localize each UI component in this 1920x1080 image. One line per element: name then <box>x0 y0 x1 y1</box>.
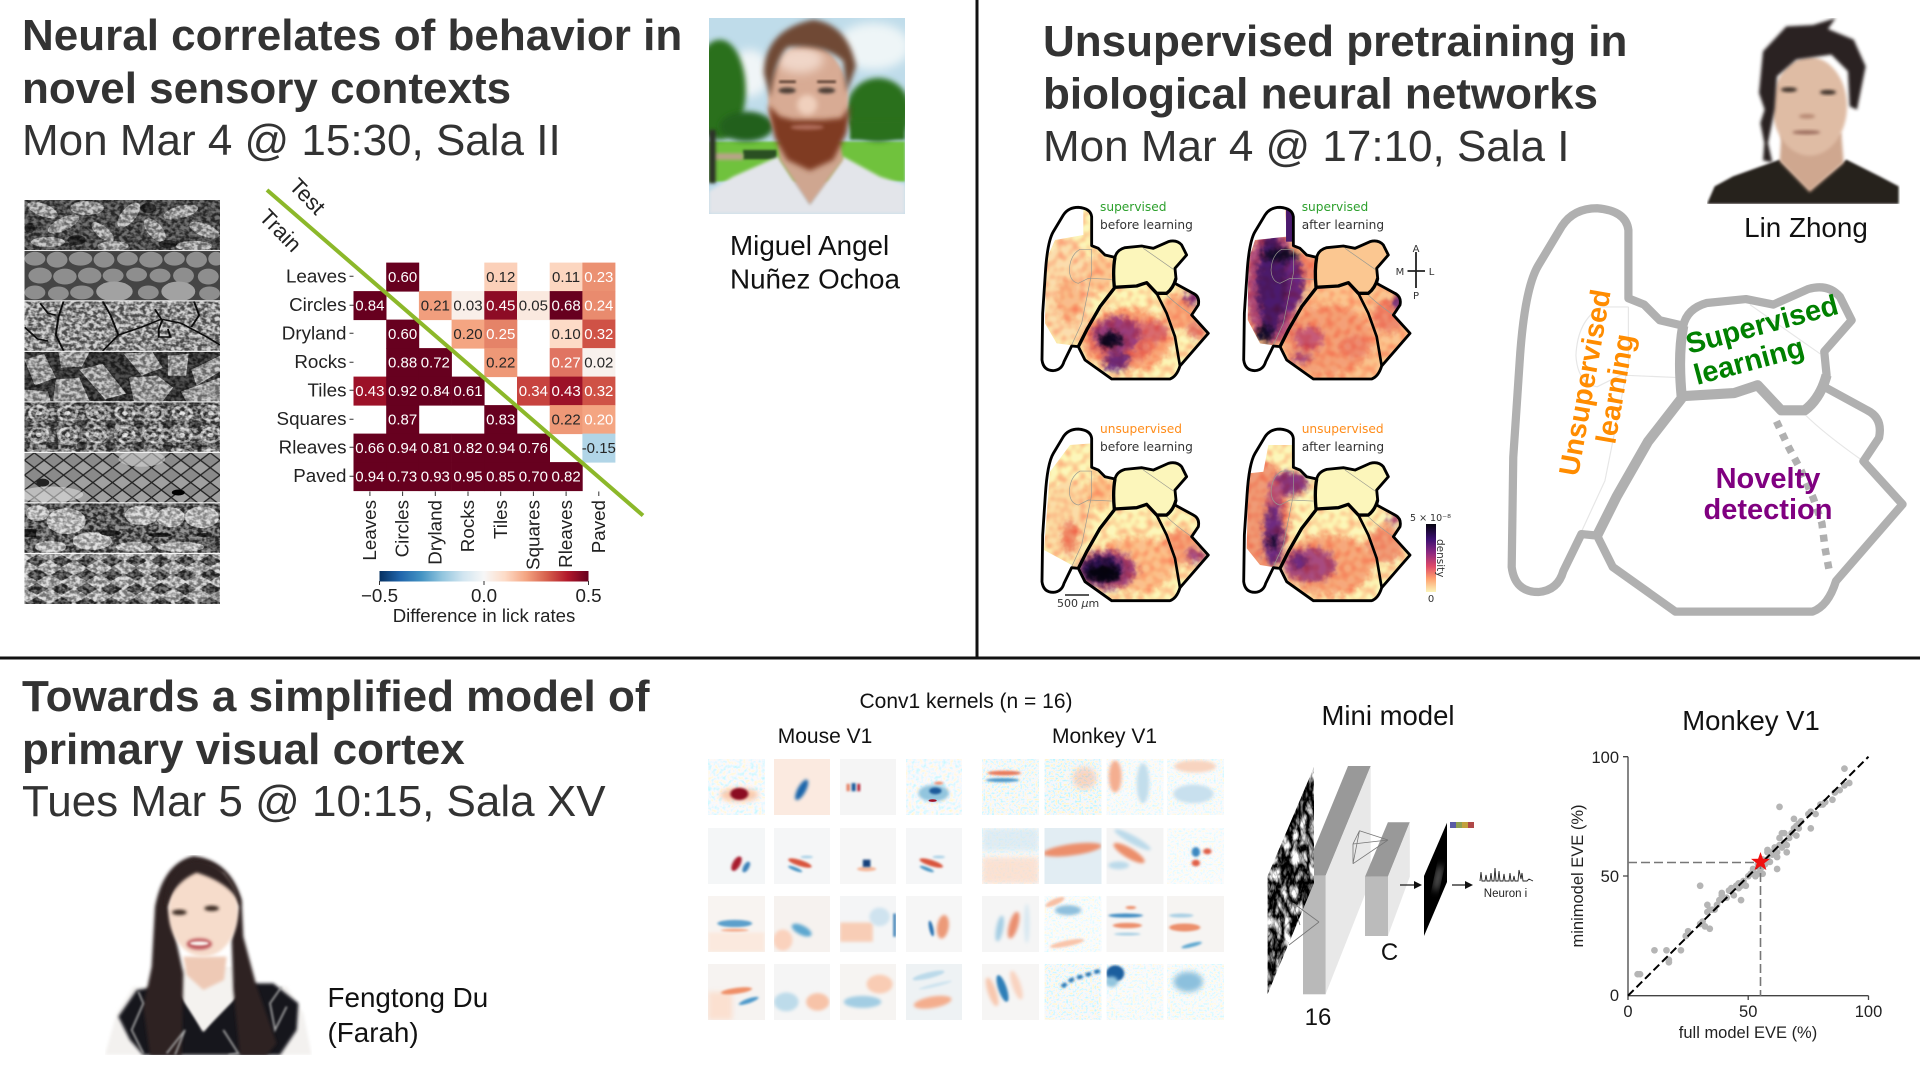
column labels: Circles <box>392 500 413 557</box>
brain map: supervised before learning <box>1037 203 1213 383</box>
column labels: Leaves <box>359 500 380 561</box>
map captions: supervised <box>1100 200 1167 214</box>
speaker name: Fengtong Du (Farah): (Farah) <box>328 1017 419 1048</box>
label: test: Test <box>284 173 330 220</box>
texture: paved <box>24 554 220 604</box>
heatmap cells: -0.15 <box>582 440 616 457</box>
photo: Lin Zhong <box>1707 18 1900 204</box>
gray brain outline <box>1512 208 1903 612</box>
first layer: 16 channels: 16 <box>1305 1004 1331 1031</box>
heatmap cells: 0.20 <box>453 326 483 343</box>
axes: 100 <box>1591 749 1619 767</box>
brain map: supervised after learning <box>1238 203 1415 383</box>
colour bar: 0.0 <box>471 585 497 606</box>
map captions: unsupervised <box>1100 422 1182 436</box>
label: supervised learning <box>1683 289 1842 392</box>
horizontal divider <box>0 656 1920 660</box>
colour bar <box>361 571 602 626</box>
heatmap cells: 0.43 <box>551 383 581 400</box>
axes: full model EVE (%) <box>1679 1024 1817 1042</box>
input image <box>1267 766 1315 996</box>
orientation cross: L <box>1429 267 1435 278</box>
guide lines to mean <box>1628 862 1760 996</box>
heatmap cells: 0.70 <box>519 469 548 486</box>
heading: talk 3 title: primary visual cortex <box>22 725 465 774</box>
heatmap cells: 0.94 <box>355 469 385 486</box>
column labels: Rocks <box>457 500 478 552</box>
heatmap cells: 0.84 <box>355 298 385 315</box>
first layer: 16 channels <box>1303 766 1371 1031</box>
texture: rocks <box>24 352 220 402</box>
row labels: Leaves <box>286 266 346 287</box>
heatmap cells: 0.92 <box>388 383 417 400</box>
arrow: to neuron <box>1452 881 1473 889</box>
heatmap cells: 0.25 <box>486 326 515 343</box>
heatmap cells: 0.87 <box>388 412 417 429</box>
heading: talk 1 title: Neural correlates of behavior in <box>22 11 682 60</box>
diagram: learning areas on brain outline <box>1512 208 1903 612</box>
heatmap cells: 0.11 <box>552 269 580 286</box>
density colour bar <box>1410 513 1451 605</box>
diagonal train/test line <box>267 190 643 516</box>
neuron trace <box>1480 868 1533 900</box>
second layer: C channels <box>1365 822 1410 966</box>
heatmap cells: 0.32 <box>584 326 613 343</box>
map captions: before learning <box>1100 218 1193 232</box>
colour bar: −0.5 <box>361 585 398 606</box>
heading: talk 1 title: Mon Mar 4 @ 15:30, Sala II <box>22 116 561 165</box>
scatter points <box>1634 765 1853 978</box>
heatmap cells: 0.34 <box>519 383 548 400</box>
column labels: Squares <box>522 500 544 570</box>
orientation cross: M <box>1396 267 1404 278</box>
heatmap cells <box>354 263 616 491</box>
convolution connection lines <box>1289 831 1388 945</box>
kernel grid: mouse V1 <box>708 759 962 1020</box>
second layer: C channels: C <box>1381 939 1398 966</box>
heatmap cells: 0.12 <box>486 269 515 286</box>
heatmap cells: 0.03 <box>453 298 483 315</box>
heading: talk 2 title: biological neural networks <box>1043 70 1598 118</box>
diagram: mini model <box>1267 700 1533 1031</box>
kernels: conv1 <box>708 690 1224 1020</box>
heatmap cells: 0.88 <box>388 355 417 372</box>
row labels: Dryland <box>282 323 346 344</box>
speaker name: Fengtong Du (Farah): Fengtong Du <box>328 982 488 1013</box>
heatmap: difference in lick rates <box>254 173 643 626</box>
heatmap cells: 0.94 <box>486 440 515 457</box>
row labels: Squares <box>277 408 346 429</box>
heatmap cells: 0.60 <box>388 269 417 286</box>
density colour bar: density <box>1434 539 1446 578</box>
texture: tiles <box>24 452 220 502</box>
heatmap cells: 0.81 <box>421 440 450 457</box>
orientation cross <box>1396 244 1435 302</box>
heading: talk 2 title: Mon Mar 4 @ 17:10, Sala I <box>1043 122 1569 171</box>
column labels: Rleaves <box>555 500 576 568</box>
label: supervised learning: Supervised <box>1683 289 1842 361</box>
density colour bar: 5 × 10⁻⁸ <box>1410 513 1451 524</box>
axes: 0 <box>1623 1003 1633 1021</box>
row labels: Tiles <box>308 380 346 401</box>
texture: rotated leaves <box>24 503 220 553</box>
axes: 0 <box>1610 987 1619 1005</box>
heatmap cells: 0.45 <box>486 298 515 315</box>
label: unsupervised learning: learning <box>1590 331 1641 446</box>
map captions: after learning <box>1302 218 1384 232</box>
panel: simplified model of V1 <box>22 672 1882 1055</box>
label: monkey V1: Monkey V1 <box>1052 725 1157 748</box>
density colour bar: 0 <box>1428 594 1434 605</box>
heatmap cells: 0.02 <box>584 355 613 372</box>
row labels: Circles <box>289 294 346 315</box>
heatmap cells: 0.24 <box>584 298 613 315</box>
label: supervised learning: learning <box>1691 332 1808 392</box>
texture stimuli column <box>18 198 224 604</box>
vertical divider <box>976 0 978 658</box>
heatmap cells: 0.10 <box>551 326 581 343</box>
orientation cross: A <box>1413 244 1420 255</box>
heading: talk 2 title: Unsupervised pretraining in <box>1043 17 1627 66</box>
column labels <box>359 492 609 570</box>
heatmap cells: 0.94 <box>388 440 417 457</box>
heatmap cells: 0.82 <box>551 469 581 486</box>
heatmap cells: 0.84 <box>421 383 450 400</box>
heading: talk 1 title <box>22 11 682 165</box>
chart title: Monkey V1 <box>1682 705 1820 736</box>
brain map: unsupervised before learning <box>1037 425 1213 605</box>
heatmap cells: 0.43 <box>355 383 385 400</box>
star: mean <box>1751 852 1770 870</box>
chart: monkey V1 scatter <box>1569 705 1882 1042</box>
heatmap cells: 0.76 <box>519 440 548 457</box>
column labels: Paved <box>588 500 609 553</box>
label: novelty detection <box>1704 463 1832 526</box>
row labels: Rleaves <box>279 437 346 458</box>
axes <box>1569 749 1882 1042</box>
mini model title: Mini model <box>1322 700 1454 731</box>
map captions: after learning <box>1302 440 1384 454</box>
identity line <box>1628 757 1868 996</box>
panel: unsupervised pretraining <box>1037 17 1903 612</box>
readout map <box>1424 823 1447 936</box>
kernels title: Conv1 kernels (n = 16) <box>859 690 1073 713</box>
label: unsupervised learning: Unsupervised <box>1553 287 1618 478</box>
texture: squares <box>24 402 220 452</box>
row labels: Paved <box>293 465 346 486</box>
heatmap cells: 0.20 <box>584 412 613 429</box>
map captions <box>1100 200 1384 454</box>
axes: 50 <box>1601 868 1619 886</box>
neuron trace: Neuron i <box>1484 888 1527 900</box>
label: novelty detection: Novelty <box>1716 463 1820 495</box>
colour bar: 0.5 <box>575 585 602 606</box>
colour key <box>1450 822 1474 828</box>
heatmap cells: 0.27 <box>551 355 581 372</box>
heatmap cells: 0.68 <box>551 298 581 315</box>
heatmap cells: 0.22 <box>486 355 515 372</box>
heatmap cells: 0.21 <box>421 298 450 315</box>
scale bar: 500 μm <box>1057 597 1099 610</box>
heatmap cells: 0.66 <box>355 440 385 457</box>
column labels: Tiles <box>490 500 511 539</box>
label: train: Train <box>254 204 307 257</box>
colour bar: Difference in lick rates <box>393 605 575 626</box>
speaker name: Lin Zhong: Lin Zhong <box>1744 212 1868 243</box>
heading: talk 3 title: Towards a simplified model of <box>22 672 650 721</box>
row labels <box>277 266 354 486</box>
speaker name: Miguel Angel Nuñez Ochoa <box>730 230 901 294</box>
map captions: unsupervised <box>1302 422 1384 436</box>
column labels: Dryland <box>424 500 445 565</box>
heatmap cells: 0.72 <box>421 355 450 372</box>
heatmap cells: 0.05 <box>519 298 548 315</box>
map captions: supervised <box>1302 200 1368 214</box>
speaker name: Miguel Angel Nuñez Ochoa: Miguel Angel <box>730 230 889 261</box>
heading: talk 2 title <box>1043 17 1627 171</box>
brain map: unsupervised after learning <box>1237 425 1415 605</box>
heatmap cells: 0.85 <box>486 469 515 486</box>
heatmap cells: 0.95 <box>453 469 483 486</box>
kernel grid: monkey V1 <box>982 759 1224 1020</box>
texture: circles <box>24 250 220 300</box>
heatmap cells: 0.60 <box>388 326 417 343</box>
panel: neural correlates of behavior <box>18 11 910 626</box>
heatmap cells: 0.83 <box>486 412 515 429</box>
heatmap cells: 0.82 <box>453 440 483 457</box>
texture: dryland <box>24 301 220 351</box>
heading: talk 1 title: novel sensory contexts <box>22 64 511 113</box>
heatmap cells: 0.22 <box>551 412 581 429</box>
heatmap cells: 0.32 <box>584 383 613 400</box>
arrow: to readout map <box>1400 881 1422 889</box>
axes: 100 <box>1855 1003 1882 1021</box>
speaker name: Miguel Angel Nuñez Ochoa: Nuñez Ochoa <box>730 264 901 294</box>
label: mouse V1: Mouse V1 <box>778 725 872 748</box>
heatmap cells: 0.73 <box>388 469 417 486</box>
heading: talk 3 title <box>22 672 650 826</box>
heatmap cells: 0.93 <box>421 469 450 486</box>
heading: talk 3 title: Tues Mar 5 @ 10:15, Sala XV <box>22 777 606 826</box>
photo: Miguel Angel Nuñez Ochoa <box>709 18 905 214</box>
orientation cross: P <box>1413 291 1419 302</box>
label: novelty detection: detection <box>1704 494 1832 526</box>
row labels: Rocks <box>294 351 346 372</box>
heatmap cells: 0.61 <box>453 383 483 400</box>
speaker name: Fengtong Du (Farah) <box>328 982 488 1048</box>
heatmap cells: 0.23 <box>584 269 613 286</box>
map captions: before learning <box>1100 440 1193 454</box>
brain maps: density before and after learning <box>1037 200 1451 610</box>
axes: minimodel EVE (%) <box>1569 804 1587 948</box>
texture: leaves <box>24 200 220 250</box>
photo: Fengtong Du <box>106 855 311 1055</box>
axes: 50 <box>1739 1003 1757 1021</box>
